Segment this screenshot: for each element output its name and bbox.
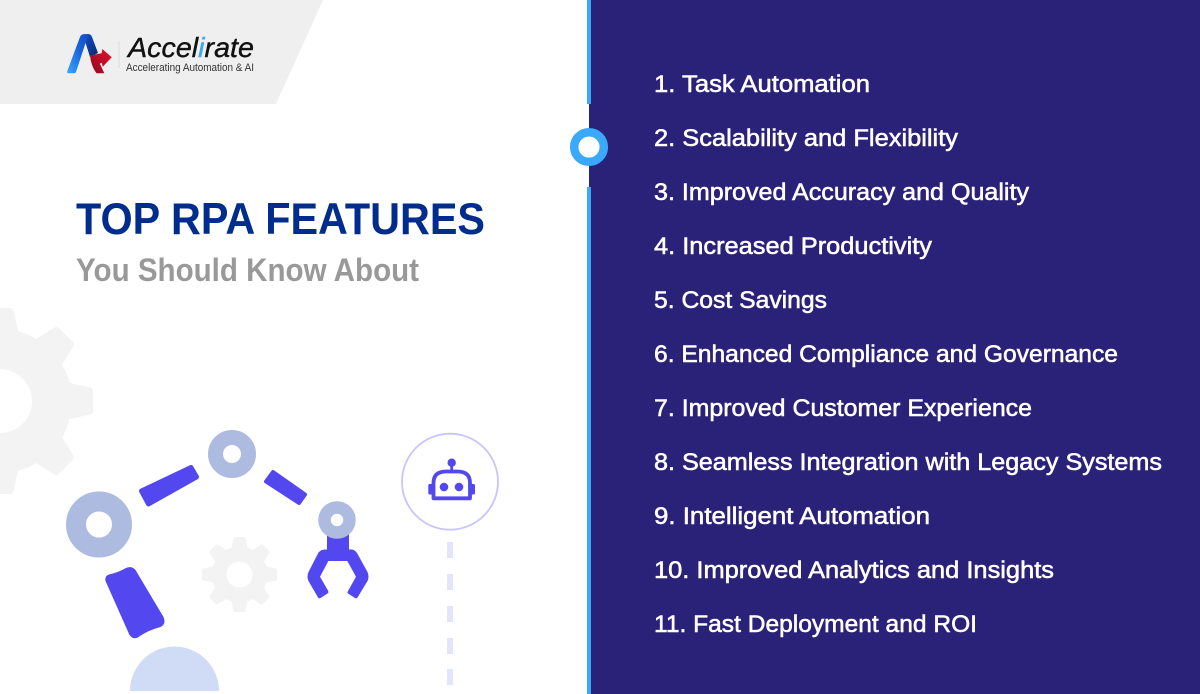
panel: feature list xyxy=(574,0,1200,694)
shoulder joint xyxy=(76,502,122,548)
subtitle: You Should Know About xyxy=(76,252,419,288)
timeline marker xyxy=(574,132,604,162)
list item 10: 10. Improved Analytics and Insights xyxy=(654,557,1054,584)
robot arm illustration xyxy=(76,438,368,691)
logo banner xyxy=(0,0,323,104)
large background gear xyxy=(0,312,90,490)
forearm segment xyxy=(266,472,305,503)
lower arm segment xyxy=(105,567,164,638)
small background gear xyxy=(204,538,276,610)
list item 1: 1. Task Automation xyxy=(654,71,870,98)
list item 5: 5. Cost Savings xyxy=(654,287,827,314)
robot head icon xyxy=(428,458,475,498)
list item 2: 2. Scalability and Flexibility xyxy=(654,125,958,152)
gripper claw xyxy=(308,530,368,598)
logo tagline: Accelerating Automation & AI xyxy=(126,62,254,74)
logo mark xyxy=(67,34,112,73)
list item 3: 3. Improved Accuracy and Quality xyxy=(654,179,1029,206)
dashed connector xyxy=(447,542,453,685)
title: TOP RPA FEATURES xyxy=(76,195,485,244)
robot icon circle xyxy=(402,434,498,530)
list item 7: 7. Improved Customer Experience xyxy=(654,395,1032,422)
list item 9: 9. Intelligent Automation xyxy=(654,503,930,530)
list item 8: 8. Seamless Integration with Legacy Systems xyxy=(654,449,1162,476)
logo wordmark: Accelirate xyxy=(126,32,254,63)
arm base xyxy=(130,646,219,691)
list item 4: 4. Increased Productivity xyxy=(654,233,932,260)
list item 11: 11. Fast Deployment and ROI xyxy=(654,611,977,638)
list item 6: 6. Enhanced Compliance and Governance xyxy=(654,341,1118,368)
wrist joint xyxy=(324,508,350,532)
elbow joint xyxy=(216,438,248,470)
upper arm segment xyxy=(142,468,196,504)
